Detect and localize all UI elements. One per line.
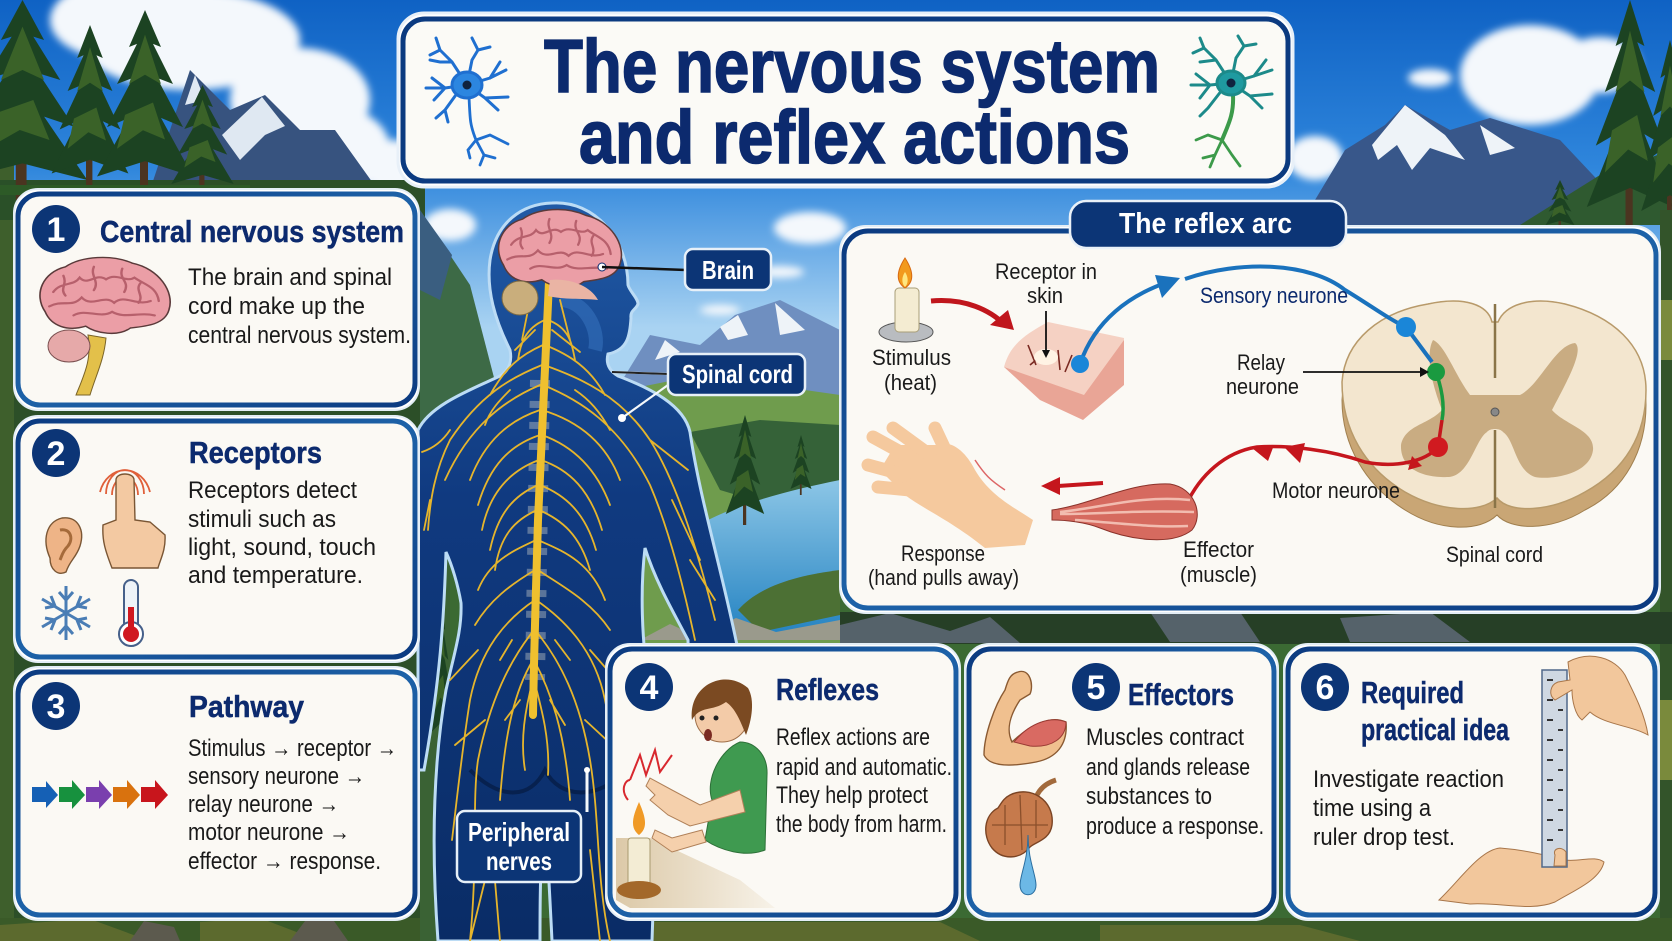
relay neurone: neurone [1226,374,1299,399]
effector label: (muscle) [1180,562,1257,587]
icon: ruler held between hands [1439,656,1648,907]
body text: The brain and spinal [188,264,392,291]
label: Brain [602,249,771,290]
number badge 6 [1301,663,1349,711]
icon: flexed arm [984,671,1066,765]
heading [1361,675,1510,747]
body text: Reflex actions are [776,724,930,751]
icon: ear [46,518,82,573]
sensory neurone label: Sensory neurone [1200,283,1348,308]
mountains left [150,70,385,230]
body text [188,477,376,589]
number badge 3: 3 [47,688,65,726]
motor neurone label: Motor neurone [1272,478,1400,503]
body text: substances to [1086,783,1212,810]
lake [690,480,840,645]
heading: Pathway [189,689,305,724]
title text: The nervous system [544,24,1160,108]
label: Peripheral nerves: Peripheral [468,817,570,847]
number badge 5 [1072,663,1120,711]
icon: blue neuron [426,38,508,165]
body text: sensory neurone → [188,763,365,790]
body text: effector → response. [188,848,381,875]
body text: time using a [1313,795,1432,822]
label: Brain: Brain [702,255,754,285]
candle stimulus [879,258,933,342]
response label [868,541,1019,590]
receptor label and pointer [995,259,1097,358]
label: Spinal cord [612,354,805,422]
response label: Response [901,541,985,566]
body text: produce a response. [1086,813,1264,840]
body text: Muscles contract [1086,724,1244,751]
heading: Central nervous system [100,214,404,249]
spinal cord label: Spinal cord [1446,542,1543,567]
body text: the body from harm. [776,811,947,838]
panel 6: required practical idea [1284,644,1659,920]
arrow: stimulus to skin [931,301,1014,330]
panel: the reflex arc [840,201,1660,613]
body text: light, sound, touch [188,534,376,561]
label: Spinal cord: Spinal cord [682,359,793,389]
pill heading: The reflex arc [1119,208,1292,240]
number badge 2: 2 [47,435,65,473]
body text [188,264,411,349]
illustration: boy and candle [616,679,775,908]
number badge 4: 4 [640,669,659,707]
heading: Effectors [1128,677,1234,712]
number badge 5: 5 [1087,669,1105,707]
body text: They help protect [776,782,928,809]
right forest [1587,0,1672,230]
brain in head [499,209,621,287]
icon: teal neuron [1191,36,1272,167]
heading: practical idea [1361,712,1510,747]
motor neurone pathway [1186,420,1448,505]
panel 3: pathway [14,667,419,920]
body text [1086,724,1264,840]
body text: Investigate reaction [1313,766,1504,793]
number badge 3 [32,682,80,730]
vertebrae [535,380,540,680]
spinal cord [533,282,549,715]
effector label [1180,537,1257,587]
receptor label and pointer: Receptor in [995,259,1097,284]
relay neurone [1226,350,1445,420]
clouds [50,0,1640,315]
stimulus label [872,345,951,395]
receptor label and pointer: skin [1027,283,1063,308]
number badge 4 [625,663,673,711]
body text: motor neurone → [188,819,350,846]
human figure with nervous system [418,203,738,941]
icon: brain [40,257,170,395]
body text [776,724,952,838]
central distant mountains [610,300,840,420]
panel 5: effectors [965,644,1278,920]
heading: Required [1361,675,1464,710]
title banner [398,13,1293,187]
lower forest strip [840,612,1672,644]
peripheral nerves [422,300,715,941]
mountains right [1300,105,1640,225]
left forest [0,150,14,941]
body text: ruler drop test. [1313,824,1455,851]
heading: Receptors [189,435,322,470]
effector label: Effector [1183,537,1254,562]
body text: relay neurone → [188,791,339,818]
number badge 2 [32,429,80,477]
panel 4: reflexes [606,644,960,920]
stimulus label: (heat) [884,370,937,395]
number badge 6: 6 [1316,669,1334,707]
chain of coloured arrows [32,780,168,809]
body text: Stimulus → receptor → [188,735,397,762]
sensory neurone pathway [1071,267,1432,373]
body text: Receptors detect [188,477,357,504]
relay neurone: Relay [1237,350,1285,375]
title banner: and reflex actions [579,95,1130,179]
figure silhouette [418,203,738,941]
body text: rapid and automatic. [776,754,952,781]
body text: cord make up the [188,293,365,320]
panel 2: receptors [14,416,419,662]
icon: touch hand [100,470,165,568]
arrow: muscle to hand [1041,477,1103,495]
icon: snowflake [42,586,90,640]
body text: central nervous system. [188,322,411,349]
icon: thermometer [119,580,143,646]
icon: gland with droplet [986,780,1056,895]
label: Peripheral nerves: nerves [486,846,552,876]
panel 1: central nervous system [14,189,419,410]
hand pulling away [868,428,1033,548]
body text [1313,766,1504,851]
response label: (hand pulls away) [868,565,1019,590]
body text: and temperature. [188,562,363,589]
body text: stimuli such as [188,506,336,533]
effector muscle [1052,484,1197,540]
body text: and glands release [1086,754,1250,781]
skin block [1004,322,1124,420]
spinal cord cross-section [1342,301,1646,527]
pill heading [1070,201,1346,248]
heading: Reflexes [776,672,879,707]
number badge 1 [32,205,80,253]
stimulus label: Stimulus [872,345,951,370]
label: Peripheral nerves [457,767,590,882]
number badge 1: 1 [47,211,65,249]
meadow [600,375,840,660]
body text [188,735,397,875]
